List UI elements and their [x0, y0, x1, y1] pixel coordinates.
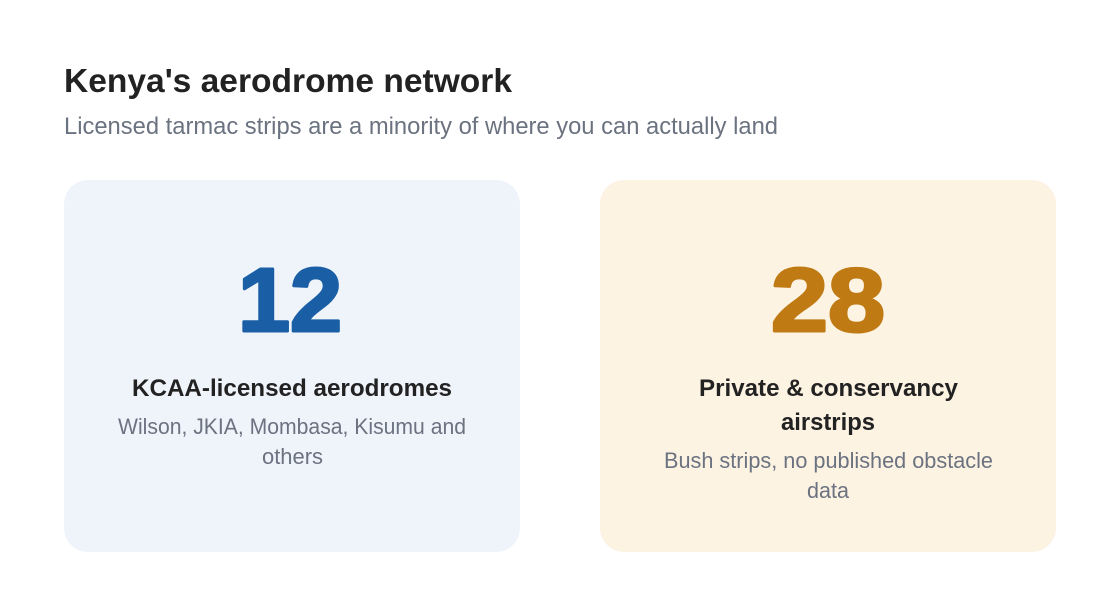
card description: licensed examples: others [262, 444, 323, 469]
card description: licensed examples [118, 414, 466, 469]
card label: private and conservancy airstrips [699, 375, 959, 436]
big number: 28: 28 [771, 251, 885, 351]
card description: bush strips: Bush strips, no published obstacle [664, 448, 993, 473]
card label: private and conservancy airstrips: Private & conservancy [699, 375, 959, 402]
card description: bush strips [664, 448, 993, 503]
card description: bush strips: data [807, 478, 850, 503]
panel: KCAA-licensed aerodromes [64, 180, 520, 552]
panel: private and conservancy airstrips [600, 180, 1056, 552]
big number: 12: 12 [238, 251, 342, 351]
card background: amber [600, 180, 1056, 552]
card background: blue [64, 180, 520, 552]
card label: private and conservancy airstrips: airstrips [781, 409, 875, 436]
title: Kenya's aerodrome network [64, 62, 513, 99]
subtitle: Licensed tarmac strips are a minority of where you can actually land [64, 113, 778, 140]
card label: KCAA-licensed aerodromes: KCAA-licensed aerodromes [132, 375, 452, 402]
card description: licensed examples: Wilson, JKIA, Mombasa, Kisumu and [118, 414, 466, 439]
